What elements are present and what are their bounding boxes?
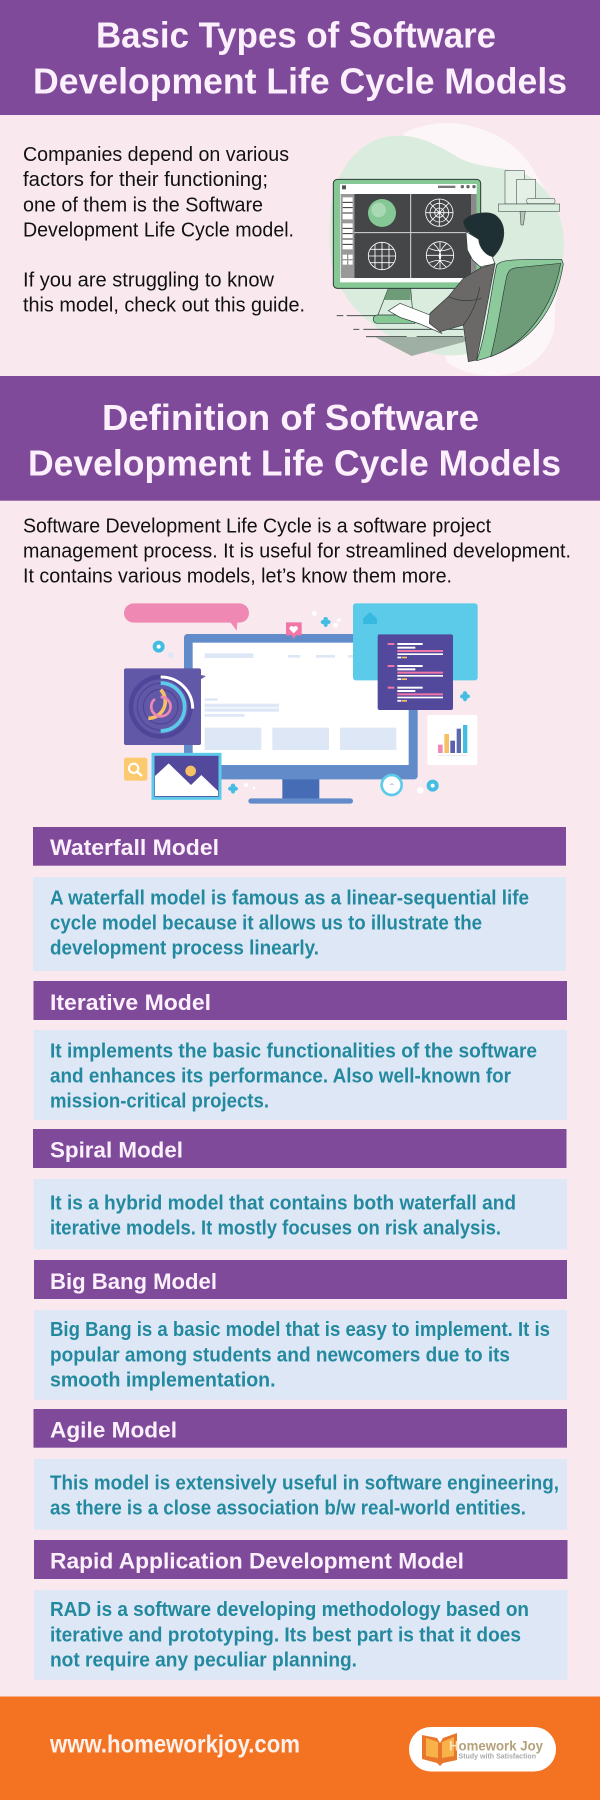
monitor [184,634,418,804]
section heading: definition: Development Life Cycle Models [28,442,561,483]
icon: search [124,758,147,781]
panel: rapid application development model [34,1540,568,1680]
panel: agile model: This model is extensively useful in software engineering, [50,1472,559,1494]
monitor [333,179,481,288]
icon: heart tag [286,622,302,639]
panel: rapid application development model: iterative and prototyping. Its best part is that it does [50,1624,521,1646]
illustration: software dashboard [124,603,478,804]
panel: rapid application development model: not require any peculiar planning. [50,1650,357,1672]
panel: iterative model [34,981,567,1120]
panel: spiral model: Spiral Model [50,1138,183,1163]
panel: iterative model: It implements the basic functionalities of the software [50,1040,537,1062]
panel: waterfall model: development process linearly. [50,938,319,960]
icon: shelf with books [498,171,560,225]
icon: clock [382,775,402,795]
definition text: management process. It is useful for streamlined development. [23,540,571,562]
intro text: Development Life Cycle model. [23,220,294,242]
person [388,213,504,362]
logo [409,1727,556,1772]
panel: waterfall model: Waterfall Model [50,835,219,860]
chair [477,259,563,361]
title banner: Development Life Cycle Models [33,60,567,101]
panel: code [378,634,453,710]
section heading: definition [0,376,600,501]
intro text: Companies depend on various [23,144,289,166]
bar chart card [427,715,477,765]
panel: spiral model: iterative models. It mostly focuses on risk analysis. [50,1217,501,1239]
panel: rapid application development model: RAD is a software developing methodology based on [50,1599,529,1621]
title banner [0,0,600,115]
intro text: If you are struggling to know [23,270,275,292]
panel: spiral model: It is a hybrid model that contains both waterfall and [50,1192,516,1214]
section heading: definition: Definition of Software [102,397,479,438]
panel: big bang model: Big Bang is a basic model that is easy to implement. It is [50,1319,550,1341]
panel: iterative model: and enhances its performance. Also well-known for [50,1066,511,1088]
website url: www.homeworkjoy.com [49,1731,300,1759]
speech bubble [124,603,249,631]
intro text: this model, check out this guide. [23,295,305,317]
monitor stand [376,288,413,320]
footer [0,1696,600,1800]
intro text: one of them is the Software [23,194,263,216]
panel: iterative model: mission-critical projects. [50,1091,269,1113]
panel: agile model: as there is a close association b/w real-world entities. [50,1498,526,1520]
logo: Study with Satisfaction [458,1752,536,1760]
panel: big bang model: popular among students and newcomers due to its [50,1345,510,1367]
panel: big bang model: Big Bang Model [50,1269,217,1294]
illustration: person at computer [330,123,564,376]
desk lines [337,316,463,337]
icon: photo [153,754,220,798]
panel: big bang model [34,1260,567,1400]
definition text [23,515,571,587]
panel: agile model: Agile Model [50,1418,177,1443]
panel: rapid application development model: Rapid Application Development Model [50,1549,464,1574]
definition text: Software Development Life Cycle is a software project [23,515,491,537]
panel: spiral model [33,1129,567,1249]
panel: waterfall model [33,827,566,971]
panel: agile model [34,1409,567,1530]
intro text [23,144,305,317]
title banner: Basic Types of Software [96,15,496,56]
panel: big bang model: smooth implementation. [50,1370,276,1392]
logo: Homework Joy [449,1738,543,1754]
keyboard [373,315,415,323]
panel: iterative model: Iterative Model [50,990,211,1015]
intro text: factors for their functioning; [23,169,268,191]
panel: radial chart [124,668,206,745]
panel: waterfall model: A waterfall model is famous as a linear-sequential life [50,887,529,909]
icon: plus marks and dots [153,611,470,794]
definition text: It contains various models, let’s know them more. [23,565,452,587]
panel: blue window [353,603,478,680]
panel: waterfall model: cycle model because it allows us to illustrate the [50,912,482,934]
